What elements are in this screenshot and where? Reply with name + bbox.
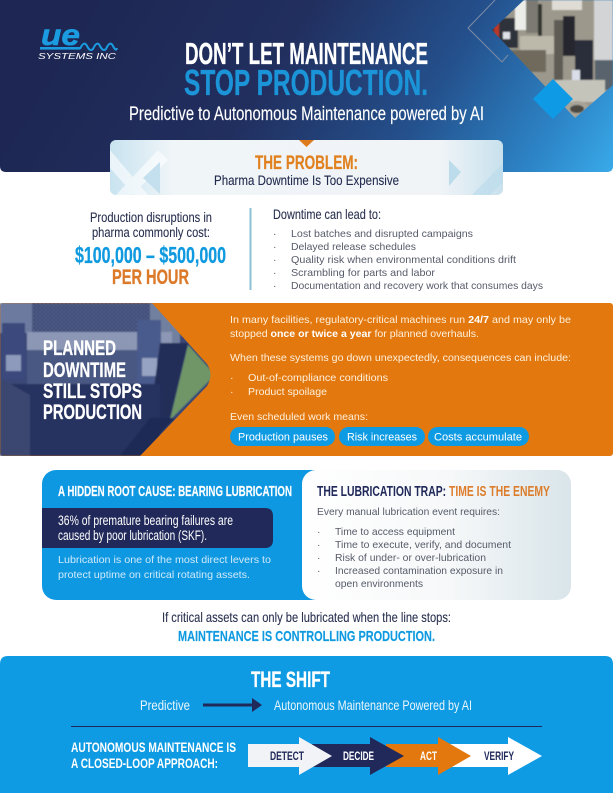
list: open environments [335,578,423,590]
list: · [317,539,320,551]
heading: PLANNED [43,337,116,360]
subheading: Pharma Downtime Is Too Expensive [214,172,399,188]
list: downtime consequences: Scrambling for parts and labor [291,267,436,279]
body text: Out-of-compliance conditions [248,372,388,384]
logo: UE Systems Inc [38,19,117,61]
panel: the problem [110,140,503,195]
subtitle: Predictive to Autonomous Maintenance powered by AI [129,104,484,125]
list: Time to access equipment [335,526,455,538]
pill: risk increases [339,427,425,446]
title: DON’T LET MAINTENANCE [185,36,428,71]
cost callout: Production disruptions in [90,210,212,225]
arrow: verify: VERIFY [484,749,514,763]
heading: DOWNTIME [43,359,126,382]
list: downtime consequences: · [273,228,276,240]
panel: the shift [0,656,613,793]
arrow: decide [312,737,404,775]
callout: maintenance is controlling production: MAINTENANCE IS CONTROLLING PRODUCTION. [178,628,435,645]
arrow [203,698,262,712]
callout: maintenance is controlling production: If critical assets can only be lubricated when the line stops: [162,609,451,625]
list: downtime consequences: · [273,254,276,266]
list [317,506,511,590]
body text: When these systems go down unexpectedly, consequences can include: [230,352,571,364]
stat bar: 36% of premature bearing failures are [58,513,233,528]
pill: production pauses [230,427,335,446]
heading: THE LUBRICATION TRAP: TIME IS THE ENEMY [317,484,550,500]
pill: costs accumulate: Costs accumulate [434,432,522,444]
panel: planned downtime [0,303,613,456]
heading [43,337,142,424]
logo: UE Systems Inc: ue [41,19,80,52]
arrow: act [386,737,471,775]
pill: costs accumulate [428,427,529,446]
list: · [317,526,320,538]
list: downtime consequences: Delayed release schedules [291,241,416,253]
closed-loop label: A CLOSED-LOOP APPROACH: [71,755,218,771]
shift row [140,697,472,713]
title: STOP PRODUCTION. [184,62,428,103]
closed-loop label: AUTONOMOUS MAINTENANCE IS [71,739,236,755]
panel: lubrication trap [302,470,571,600]
photo: equipment with lubricators [0,303,215,456]
body text: · [230,372,234,384]
body text: In many facilities, regulatory-critical machines run 24/7 and may only be [230,314,571,326]
list: Risk of under- or over-lubrication [335,552,486,564]
arrow: detect: DETECT [270,749,304,763]
pill: risk increases: Risk increases [347,432,417,444]
logo: UE Systems Inc: SYSTEMS INC [38,51,117,61]
cost callout: pharma commonly cost: [92,225,210,240]
list: · [317,552,320,564]
list: Increased contamination exposure in [335,565,503,577]
panel: hidden root cause [42,470,332,600]
cost callout: $100,000 – $500,000 [75,242,226,268]
arrow: verify [450,737,542,775]
arrow notch [299,140,314,147]
body text [230,314,571,423]
closed-loop label [71,739,236,771]
list: Time to execute, verify, and document [335,539,511,551]
heading: PRODUCTION [43,401,142,424]
list: downtime consequences: Lost batches and disrupted campaigns [291,228,473,240]
list: · [317,565,320,577]
body text: Lubrication is one of the most direct levers to [58,554,271,566]
heading: A HIDDEN ROOT CAUSE: BEARING LUBRICATION [58,484,292,500]
body text: Even scheduled work means: [230,411,368,423]
list: downtime consequences: · [273,241,276,253]
body text: protect uptime on critical rotating assets. [58,569,250,581]
body text: Product spoilage [248,386,327,398]
process arrows [248,737,542,775]
heading: THE SHIFT [251,667,330,692]
heading: THE PROBLEM: [255,153,358,174]
list: downtime consequences: · [273,280,276,292]
list: downtime consequences: Downtime can lead to: [273,206,381,222]
body text: stopped once or twice a year for planned overhauls. [230,328,479,340]
hero banner [0,0,613,172]
title [184,36,428,103]
cost callout: PER HOUR [112,266,189,289]
body text: · [230,386,234,398]
stat bar: caused by poor lubrication (SKF). [58,528,207,543]
list: downtime consequences [273,206,543,292]
cost callout [75,210,226,289]
list: downtime consequences: Quality risk when environmental conditions drift [291,254,516,266]
arrow: detect [248,737,332,775]
callout: maintenance is controlling production [162,609,451,645]
shift row: Predictive [140,697,190,713]
list: Every manual lubrication event requires: [317,506,500,518]
arrow: decide: DECIDE [343,749,374,763]
body text [58,554,271,581]
list: downtime consequences: Documentation and recovery work that consumes days [291,280,543,292]
stat bar [42,508,273,548]
list: downtime consequences: · [273,267,276,279]
photo: machinery diamond [468,0,613,120]
arrow: act: ACT [420,749,437,763]
pill: production pauses: Production pauses [238,432,328,444]
shift row: Autonomous Maintenance Powered by AI [274,697,472,713]
heading: STILL STOPS [43,380,142,403]
